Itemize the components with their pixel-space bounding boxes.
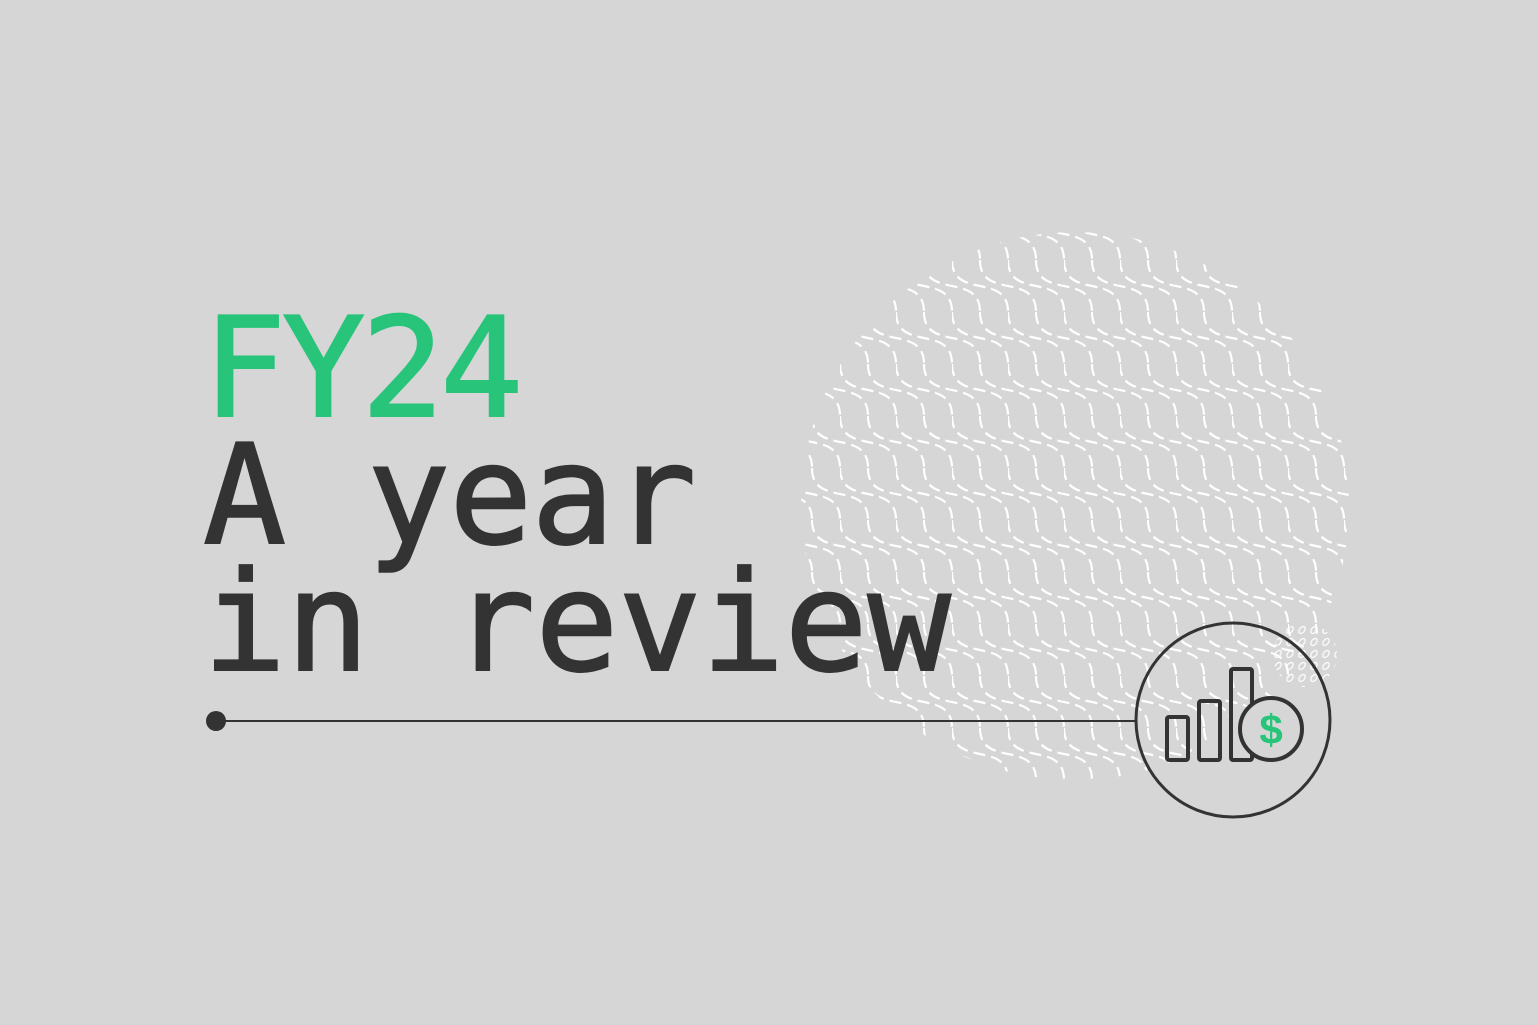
title block <box>203 288 952 703</box>
heading: A year: A year <box>203 415 696 576</box>
title: FY24: FY24 <box>203 288 519 449</box>
background wave pattern circle <box>801 232 1349 779</box>
timeline line with dot <box>206 711 1135 731</box>
icon: bar chart with dollar: $ <box>1259 706 1283 753</box>
heading: in review: in review <box>203 542 952 703</box>
icon: bar chart with dollar <box>1134 622 1332 818</box>
